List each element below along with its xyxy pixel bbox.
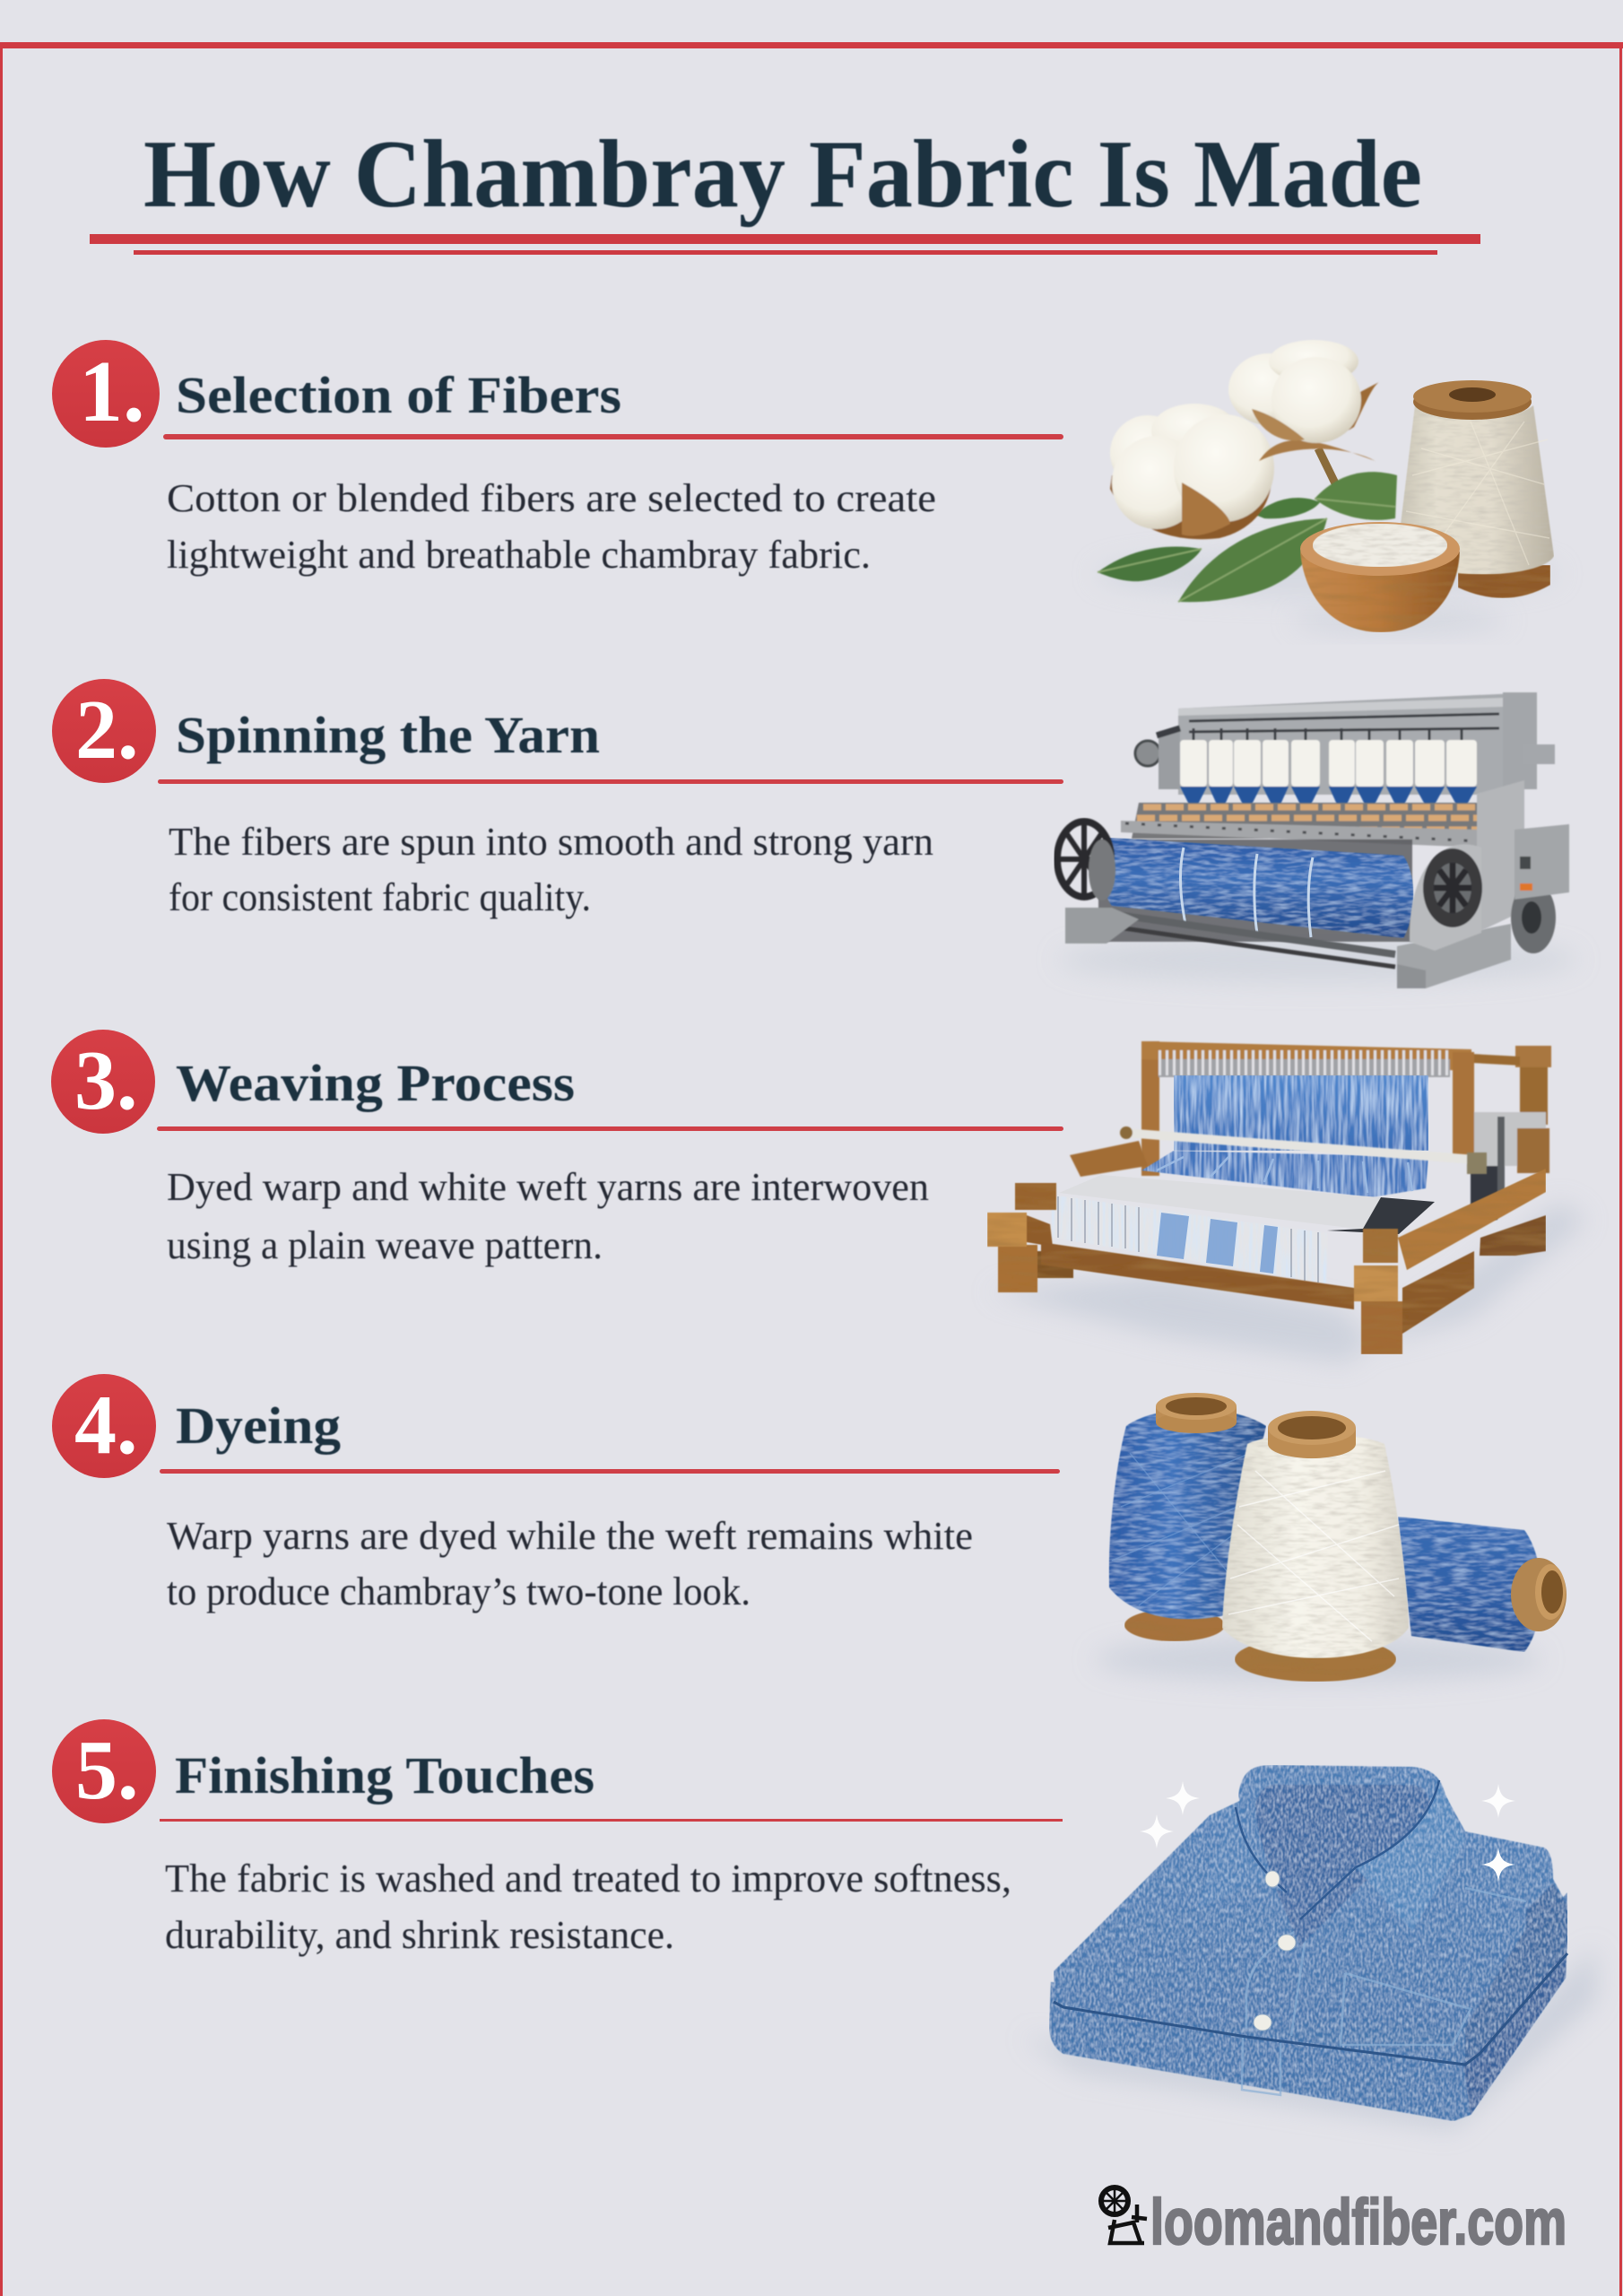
- floor shadow: [986, 1202, 1587, 1363]
- buttons: [1254, 1871, 1296, 2031]
- step 3: weaving process: [51, 1030, 1063, 1267]
- heading 3: Weaving Process: [176, 1054, 575, 1112]
- body 5: [165, 1857, 1011, 1957]
- front frame: [987, 1169, 1546, 1354]
- body 1: lightweight and breathable chambray fabric.: [167, 533, 871, 577]
- number badge 4: [52, 1374, 156, 1478]
- body 2: [169, 820, 933, 919]
- control box: [1515, 824, 1569, 900]
- stem: [1318, 448, 1338, 489]
- illustration: folded chambray shirt: [1022, 1765, 1596, 2130]
- title: How Chambray Fabric Is Made: [143, 121, 1422, 228]
- illustration: yarn spools: [1094, 1393, 1567, 1683]
- body 5: The fabric is washed and treated to improve softness,: [165, 1857, 1011, 1900]
- body 3: Dyed warp and white weft yarns are interwoven: [167, 1165, 929, 1209]
- blue warp threads: [1141, 1075, 1428, 1197]
- heading 5: Finishing Touches: [175, 1746, 595, 1805]
- top layer body: [1054, 1794, 1567, 2061]
- cloth: [1050, 1175, 1435, 1283]
- heading 4: Dyeing: [176, 1396, 341, 1455]
- number badge 5: [52, 1719, 156, 1823]
- body 3: [167, 1165, 929, 1267]
- body 4: to produce chambray’s two-tone look.: [167, 1570, 751, 1613]
- cross bar: [1070, 1126, 1487, 1177]
- frame: [1135, 692, 1555, 795]
- number badge 3: [51, 1030, 155, 1134]
- left flywheel: [1057, 822, 1115, 900]
- step 5: finishing touches: [52, 1719, 1063, 1957]
- bottom layer: [1049, 1892, 1567, 2121]
- body 4: [167, 1514, 973, 1613]
- body 2: The fibers are spun into smooth and strong yarn: [169, 820, 933, 864]
- number badge 5: 5.: [75, 1724, 138, 1817]
- step 1: selection of fibers: [52, 340, 1063, 577]
- white spool: [1222, 1411, 1409, 1682]
- bowl of fibers: [1300, 522, 1460, 632]
- number badge 2: 2.: [75, 683, 138, 777]
- cotton boll lower: [1110, 404, 1274, 539]
- collar: [1197, 1765, 1465, 1946]
- icon: spinning wheel: [1100, 2187, 1147, 2243]
- cotton boll upper: [1228, 340, 1379, 461]
- logo: spinning wheel and site name: [1100, 2187, 1567, 2258]
- body 3: using a plain weave pattern.: [167, 1223, 603, 1267]
- body 1: [167, 476, 936, 577]
- right housing and wheel: [1410, 780, 1556, 953]
- rods and base: [1065, 908, 1511, 988]
- sparkles: [1140, 1781, 1515, 1882]
- number badge 4: 4.: [74, 1378, 138, 1472]
- number badge 1: [52, 340, 160, 448]
- step 4: dyeing: [52, 1374, 1060, 1613]
- body 5: durability, and shrink resistance.: [165, 1913, 674, 1957]
- number badge 1: 1.: [79, 344, 145, 440]
- number badge 3: 3.: [74, 1034, 138, 1127]
- carding rollers: [1121, 803, 1488, 848]
- leaves: [1098, 472, 1397, 602]
- back frame: [1141, 1041, 1551, 1220]
- step 2: spinning the yarn: [52, 679, 1063, 919]
- illustration: cotton bolls, yarn cone and bowl: [1094, 340, 1560, 632]
- body 2: for consistent fabric quality.: [169, 875, 591, 919]
- body 4: Warp yarns are dyed while the weft remains white: [167, 1514, 973, 1558]
- illustration: wooden loom: [986, 1041, 1587, 1363]
- horizontal blue spool: [1398, 1517, 1567, 1652]
- illustration: spinning machine: [1057, 692, 1578, 988]
- heading 2: Spinning the Yarn: [176, 706, 600, 764]
- number badge 2: [52, 679, 156, 783]
- heading 1: Selection of Fibers: [176, 366, 621, 424]
- placket and seams: [1242, 1888, 1526, 2095]
- crease between layers: [1054, 1953, 1567, 2065]
- yarn cone: [1397, 380, 1554, 598]
- blue warp roller: [1098, 838, 1413, 942]
- spools row: [1180, 740, 1477, 804]
- body 1: Cotton or blended fibers are selected to create: [167, 476, 936, 520]
- left blue spool: [1109, 1393, 1266, 1641]
